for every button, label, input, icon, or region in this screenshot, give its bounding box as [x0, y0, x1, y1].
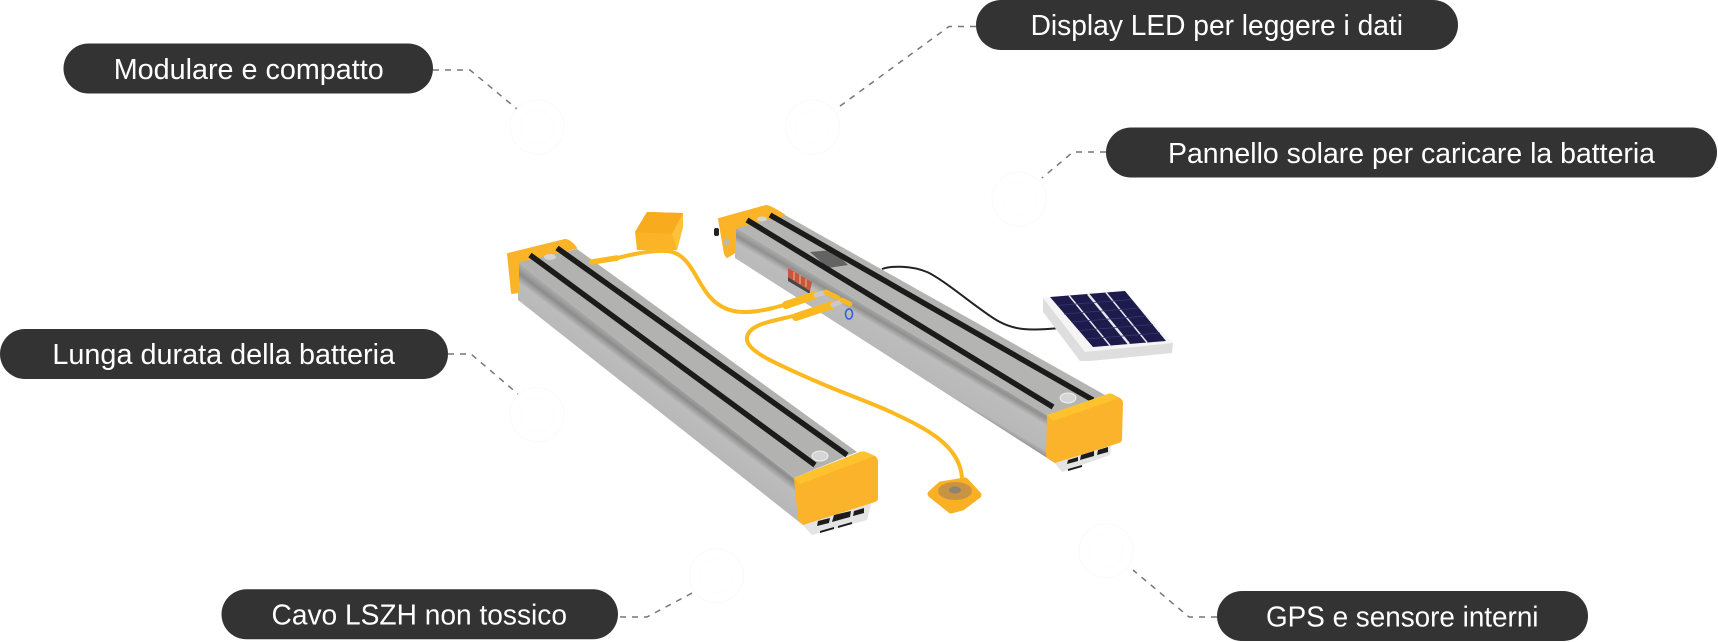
front bolt — [1060, 393, 1076, 403]
connector: Display LED — [786, 26, 976, 154]
solar status window — [810, 250, 848, 268]
illustration: yellow cables — [592, 251, 962, 478]
callout: Lunga durata della batteria: Lunga durata della batteria — [52, 339, 396, 371]
front end cap — [794, 452, 878, 525]
connector: Modulare e compatto — [433, 70, 564, 154]
back bolt — [757, 216, 767, 222]
callout: GPS e sensore interni: GPS e sensore interni — [1266, 602, 1538, 634]
top face — [518, 249, 857, 478]
front bolt — [812, 451, 828, 461]
cable to box and bar — [592, 251, 813, 312]
back bolt — [544, 254, 556, 260]
black rails — [747, 215, 1093, 407]
front end cap — [1046, 394, 1123, 463]
illustration: GPS sensor puck — [931, 481, 978, 510]
black rails — [530, 248, 847, 465]
connector: Cavo LSZH — [620, 549, 744, 617]
illustration: right aluminium bar — [714, 206, 1123, 472]
connector: Pannello solare — [992, 152, 1106, 226]
illustration: yellow junction box — [635, 212, 683, 250]
callout: Pannello solare per caricare la batteria — [1106, 128, 1717, 178]
cell separators — [1069, 292, 1147, 346]
callout: Display LED per leggere i dati — [976, 0, 1458, 50]
connector: Lunga durata — [448, 354, 564, 442]
cable to sensor — [747, 305, 962, 478]
illustration: left aluminium bar — [508, 240, 878, 535]
top face — [735, 215, 1105, 415]
solar cells — [1050, 291, 1166, 347]
illustration: solar panel — [1043, 290, 1173, 361]
side face — [518, 262, 803, 525]
callout: Modulare e compatto: Modulare e compatto — [114, 54, 384, 86]
back knob — [714, 228, 719, 236]
side face — [735, 227, 1055, 463]
callout: Cavo LSZH non tossico — [222, 589, 618, 639]
back end cap — [508, 240, 576, 293]
extrusion end — [800, 500, 872, 535]
callout: Display LED per leggere i dati: Display LED per leggere i dati — [1031, 10, 1403, 42]
connector: GPS e sensore — [1079, 524, 1217, 617]
metal plugs — [816, 293, 840, 305]
callout: GPS e sensore interni — [1217, 591, 1588, 641]
callout: Cavo LSZH non tossico: Cavo LSZH non tossico — [272, 600, 567, 632]
callout: Modulare e compatto — [64, 44, 433, 94]
cap screw — [724, 238, 729, 246]
callout: Lunga durata della batteria — [0, 329, 448, 379]
icon: blue power button — [846, 309, 852, 319]
extrusion end — [1052, 440, 1112, 472]
LED display — [788, 268, 812, 294]
connectors — [592, 258, 617, 262]
back end cap — [719, 206, 784, 257]
callout: Pannello solare per caricare la batteria: Pannello solare per caricare la batteria — [1168, 138, 1656, 170]
illustration: black solar cable — [882, 267, 1060, 330]
